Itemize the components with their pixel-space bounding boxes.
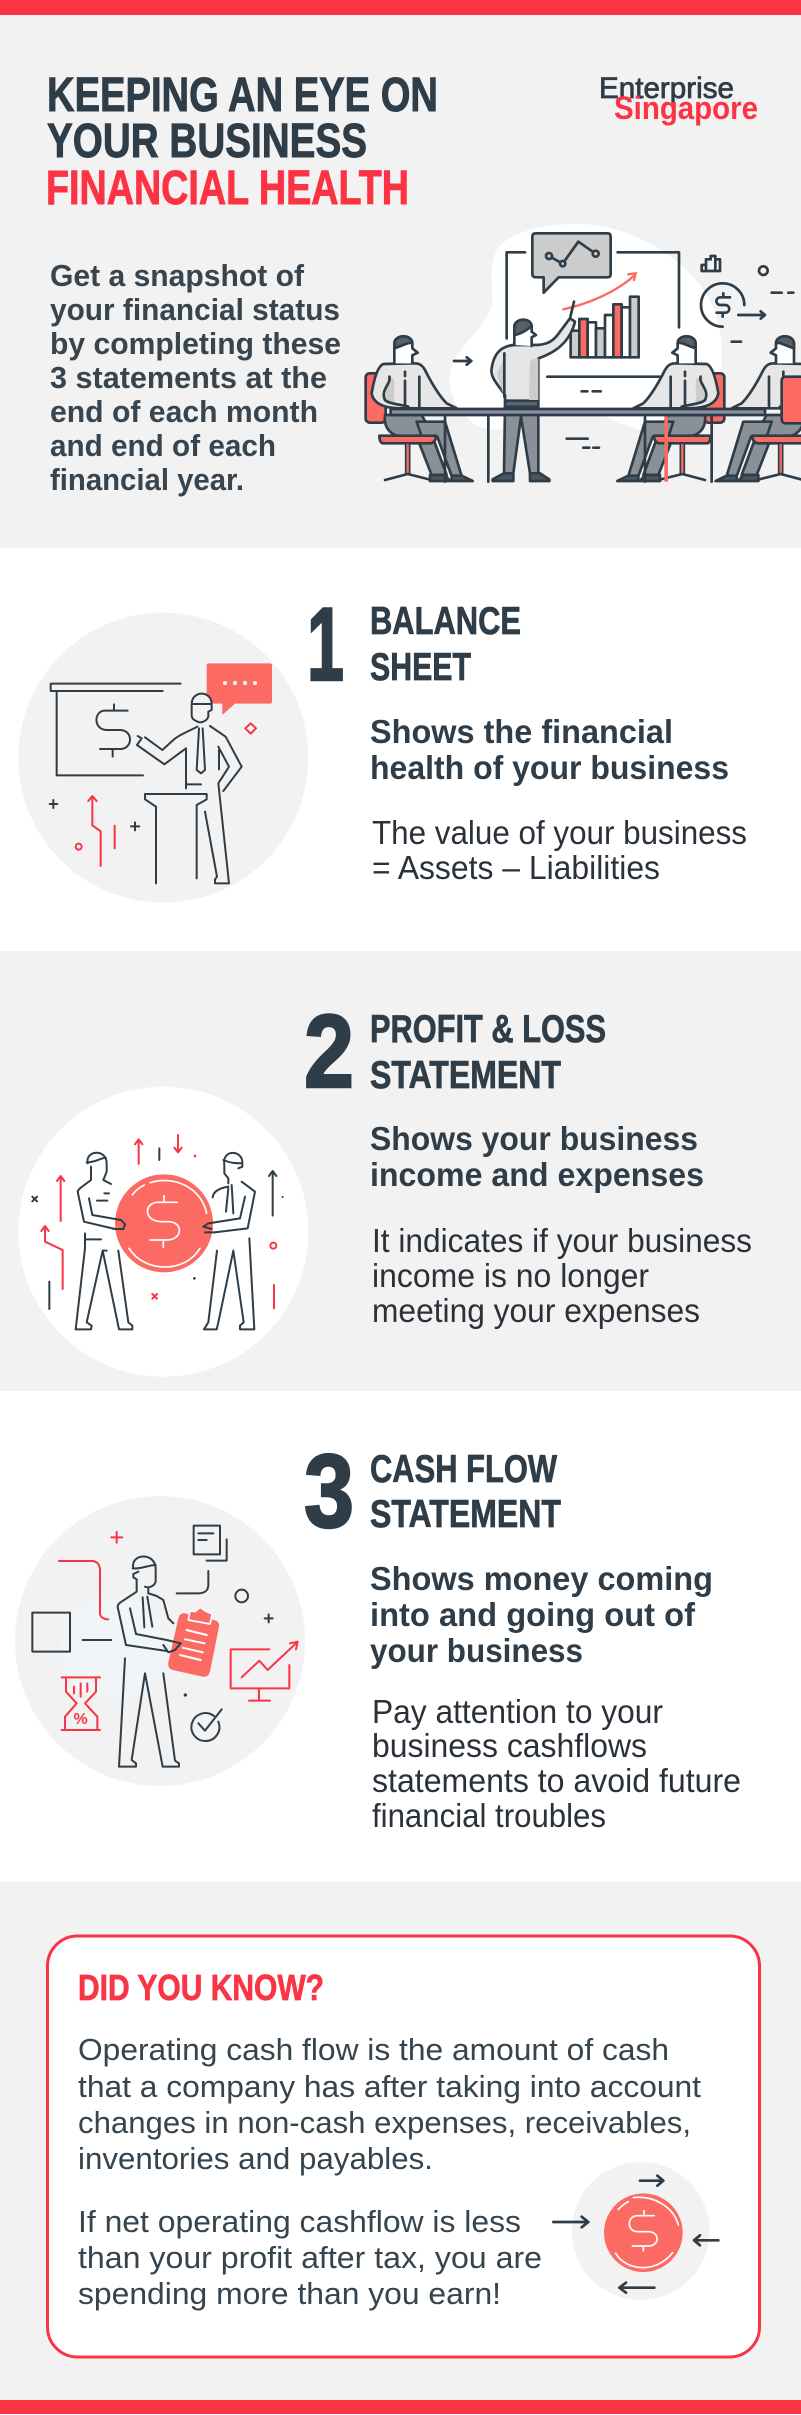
logo: Enterprise Singapore (599, 72, 758, 126)
subheading: income and expenses (370, 1156, 704, 1193)
icon: coin with arrows (553, 2162, 718, 2300)
panel: balance sheet (18, 587, 747, 903)
title (46, 69, 438, 215)
intro text: your financial status (50, 292, 340, 327)
intro text: and end of each (50, 428, 276, 463)
body text: income is no longer (372, 1257, 649, 1294)
heading: cash flow statement (370, 1448, 561, 1536)
heading: balance sheet: SHEET (370, 646, 471, 689)
body text (372, 1693, 741, 1834)
body text: business cashflows (372, 1727, 647, 1764)
heading: profit and loss: STATEMENT (370, 1054, 561, 1097)
title: FINANCIAL HEALTH (46, 162, 409, 215)
intro text: financial year. (50, 462, 244, 497)
title: KEEPING AN EYE ON (47, 69, 438, 122)
heading: balance sheet (370, 600, 521, 689)
heading: cash flow statement: CASH FLOW (370, 1448, 557, 1491)
number 2: 2 (304, 994, 354, 1110)
body text: financial troubles (372, 1797, 606, 1834)
panel: profit and loss (0, 951, 801, 1391)
number 1: 1 (307, 587, 344, 703)
body text (372, 814, 747, 886)
intro text (50, 258, 341, 497)
subheading: Shows the financial (370, 713, 673, 750)
subheading (370, 1120, 704, 1193)
body text: It indicates if your business (372, 1222, 752, 1259)
callout text: definition (78, 2032, 701, 2176)
icon: percent: % (74, 1711, 88, 1728)
callout heading: DID YOU KNOW? (78, 1967, 324, 2008)
callout text: warning: If net operating cashflow is less (78, 2204, 521, 2239)
top red bar (0, 0, 801, 15)
subheading (370, 713, 729, 786)
callout text: definition: inventories and payables. (78, 2141, 433, 2176)
subheading: your business (370, 1632, 583, 1669)
body text: The value of your business (372, 814, 747, 851)
logo: Enterprise Singapore: Singapore (614, 90, 758, 126)
callout text: warning (78, 2204, 542, 2311)
body text (372, 1222, 752, 1329)
intro text: 3 statements at the (50, 360, 327, 395)
subheading: Shows money coming (370, 1560, 713, 1597)
callout text: definition: Operating cash flow is the amount of cash (78, 2032, 669, 2067)
callout text: definition: that a company has after taking into account (78, 2069, 701, 2104)
illustration: presenter with dollar board (18, 613, 308, 903)
panel: did you know (0, 1882, 801, 2400)
subheading: Shows your business (370, 1120, 698, 1157)
heading: cash flow statement: STATEMENT (370, 1493, 561, 1536)
body text: meeting your expenses (372, 1292, 700, 1329)
heading: profit and loss: PROFIT & LOSS (370, 1008, 606, 1051)
callout box (48, 1936, 760, 2357)
intro text: by completing these (50, 326, 341, 361)
intro text: Get a snapshot of (50, 258, 305, 293)
illustration: person with clipboard (15, 1496, 305, 1786)
body text: statements to avoid future (372, 1762, 741, 1799)
panel: cash flow statement (15, 1434, 741, 1834)
bottom red bar (0, 2400, 801, 2414)
callout text: definition: changes in non-cash expenses, receivables, (78, 2105, 691, 2140)
subheading (370, 1560, 713, 1669)
illustration: boardroom presentation (366, 224, 801, 482)
number 3: 3 (304, 1434, 354, 1550)
body text: = Assets – Liabilities (372, 849, 660, 886)
callout text: warning: than your profit after tax, you are (78, 2240, 542, 2275)
heading: profit and loss (370, 1008, 606, 1097)
illustration: two people holding a coin (18, 1087, 308, 1377)
callout text: warning: spending more than you earn! (78, 2276, 501, 2311)
title: YOUR BUSINESS (47, 115, 367, 168)
subheading: health of your business (370, 749, 729, 786)
panel: header (0, 15, 801, 548)
heading: balance sheet: BALANCE (370, 600, 521, 643)
intro text: end of each month (50, 394, 318, 429)
body text: Pay attention to your (372, 1693, 663, 1730)
logo: Enterprise Singapore: Enterprise (599, 72, 734, 105)
subheading: into and going out of (370, 1596, 696, 1633)
